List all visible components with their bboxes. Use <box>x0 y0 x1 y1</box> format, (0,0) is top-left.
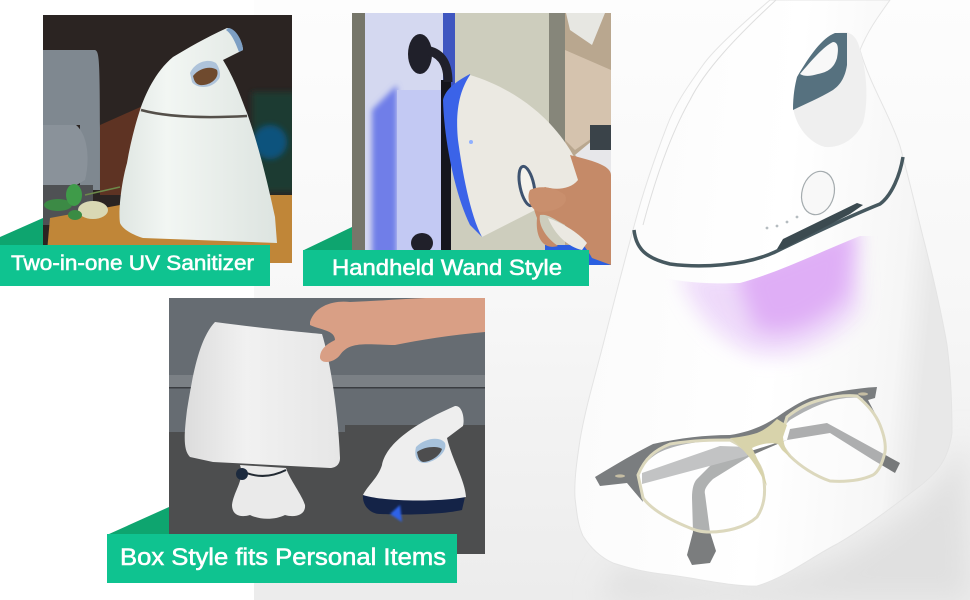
right wall <box>549 13 565 143</box>
hand <box>533 155 611 265</box>
door background <box>451 13 565 250</box>
small device base <box>363 495 465 515</box>
lid seam <box>643 0 776 225</box>
teal bokeh <box>252 92 296 192</box>
panel: photo two-in-one UV sanitizer <box>43 15 296 263</box>
wand blue edge <box>443 74 482 237</box>
wand handle below hand <box>548 218 587 250</box>
indicator dots <box>766 216 798 229</box>
glasses <box>595 387 900 565</box>
panel: photo handheld wand style <box>352 13 611 265</box>
wand handle ring <box>517 164 536 208</box>
device body <box>575 0 952 586</box>
handle hole <box>190 61 220 87</box>
label: Box Style fits Personal Items: Box Style fits Personal Items <box>120 544 446 571</box>
label: Handheld Wand Style: Handheld Wand Style <box>332 255 562 280</box>
wall <box>169 298 485 432</box>
hinge rivets <box>615 474 625 478</box>
device <box>119 28 277 243</box>
upper temple arm <box>642 446 750 484</box>
floor <box>169 425 485 554</box>
panel: photo box style <box>169 297 485 554</box>
dark gap <box>441 80 451 265</box>
label: Two-in-one UV Sanitizer: Two-in-one UV Sanitizer <box>11 252 254 275</box>
box cover <box>185 322 340 468</box>
handle blue-grey grip <box>793 33 847 110</box>
handle opening <box>800 42 838 76</box>
collar <box>240 470 286 476</box>
accent triangle: first label <box>0 218 43 246</box>
nozzle ring <box>226 28 243 52</box>
sofa <box>43 50 100 190</box>
device shadow <box>600 432 970 600</box>
bridge <box>730 419 795 486</box>
blue floor <box>545 245 611 265</box>
hand <box>310 297 485 362</box>
small device body <box>363 406 466 501</box>
lower temple arm <box>687 440 787 565</box>
paw plush <box>232 465 305 519</box>
lit door frame <box>365 13 443 265</box>
lens rims <box>638 440 765 532</box>
thumb <box>528 187 552 210</box>
browline frame <box>595 387 877 502</box>
label: Two-in-one UV Sanitizer <box>0 245 270 286</box>
panel: large sanitizer with glasses <box>575 0 970 600</box>
wand body <box>457 75 579 237</box>
label: Box Style fits Personal Items <box>107 534 457 583</box>
background <box>254 0 970 600</box>
label: Handheld Wand Style <box>303 250 589 286</box>
dark seam ring <box>634 157 903 266</box>
lid band <box>141 110 247 117</box>
purple UV glow <box>680 225 860 356</box>
wooden table <box>46 195 292 263</box>
orange floor <box>100 106 141 195</box>
handle hole <box>793 32 866 147</box>
power button <box>797 168 839 218</box>
small device hole <box>415 439 445 463</box>
door handle rosettes <box>408 34 432 74</box>
flowers <box>44 184 120 220</box>
seam thick clip <box>777 203 863 249</box>
photo background <box>43 15 292 263</box>
accent triangle: second label <box>304 227 352 251</box>
accent triangle: third label <box>109 507 169 535</box>
blue LEDs <box>469 140 473 144</box>
